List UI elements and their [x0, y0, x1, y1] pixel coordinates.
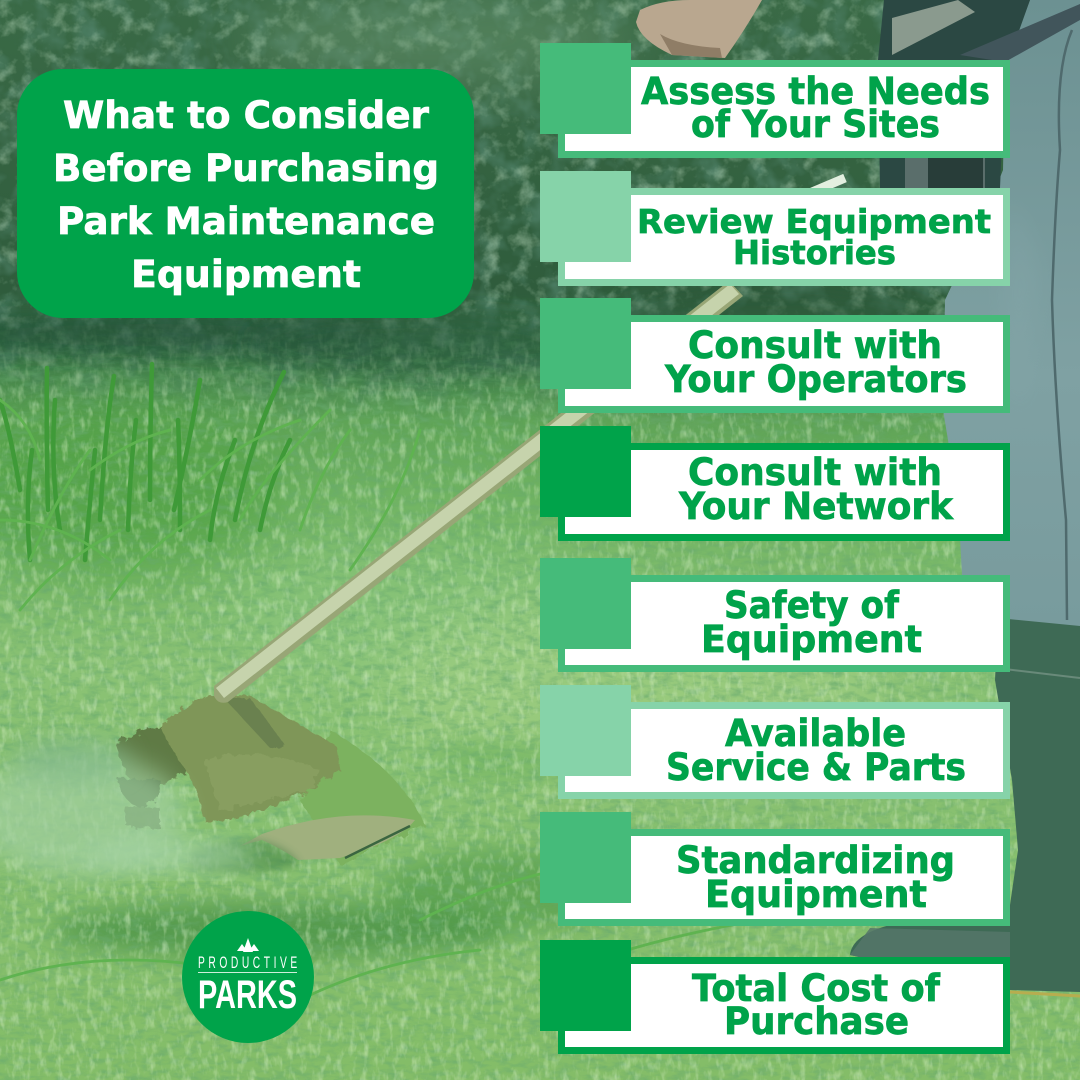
title text: Equipment	[131, 253, 361, 296]
card: Consult with Your Network	[540, 426, 1010, 541]
card: Consult with Your Network: Your Network	[678, 485, 954, 528]
card: Available Service & Parts: Service & Parts	[666, 746, 966, 789]
title text: Park Maintenance	[57, 200, 435, 243]
card: Safety of Equipment	[540, 558, 1010, 672]
trimmer pole	[214, 178, 845, 703]
card: Available Service & Parts: Available	[725, 712, 906, 755]
card: Assess the Needs of Your Sites: Assess the Needs	[641, 70, 990, 113]
smoke haze	[0, 738, 255, 877]
card: Standardizing Equipment: Standardizing	[676, 839, 955, 882]
card: Available Service & Parts	[540, 685, 1010, 799]
card: Safety of Equipment: Equipment	[701, 618, 922, 661]
logo: Productive Parks: PARKS	[198, 973, 297, 1017]
title text: Before Purchasing	[53, 147, 439, 190]
card: Review Equipment Histories: Histories	[733, 233, 896, 272]
card: Total Cost of Purchase: Total Cost of	[692, 967, 941, 1010]
card: Total Cost of Purchase: Purchase	[724, 1000, 909, 1043]
card: Consult with Your Operators	[540, 298, 1010, 413]
title panel	[17, 69, 474, 318]
card: Review Equipment Histories: Review Equipment	[637, 202, 991, 241]
card: Standardizing Equipment: Equipment	[705, 873, 927, 916]
trimmer head	[116, 692, 425, 873]
card: Total Cost of Purchase	[540, 940, 1010, 1054]
card: Assess the Needs of Your Sites: of Your Sites	[691, 103, 940, 146]
operator: jeans and boot	[850, 0, 1080, 996]
logo: Productive Parks	[182, 911, 314, 1043]
card: Consult with Your Network: Consult with	[688, 451, 942, 494]
card: Review Equipment Histories	[540, 171, 1010, 286]
tall grass blades	[0, 364, 760, 1000]
logo: Productive Parks: PRODUCTIVE	[198, 954, 297, 972]
card: Consult with Your Operators: Consult with	[688, 324, 942, 367]
title text: What to Consider	[63, 94, 430, 137]
icon: trees	[237, 938, 259, 952]
card: Safety of Equipment: Safety of	[724, 584, 900, 627]
title text	[53, 94, 439, 296]
operator: belt, straps and hand	[636, 0, 1080, 190]
card: Consult with Your Operators: Your Operators	[664, 358, 967, 401]
card: Standardizing Equipment	[540, 812, 1010, 926]
card: Assess the Needs of Your Sites	[540, 43, 1010, 158]
